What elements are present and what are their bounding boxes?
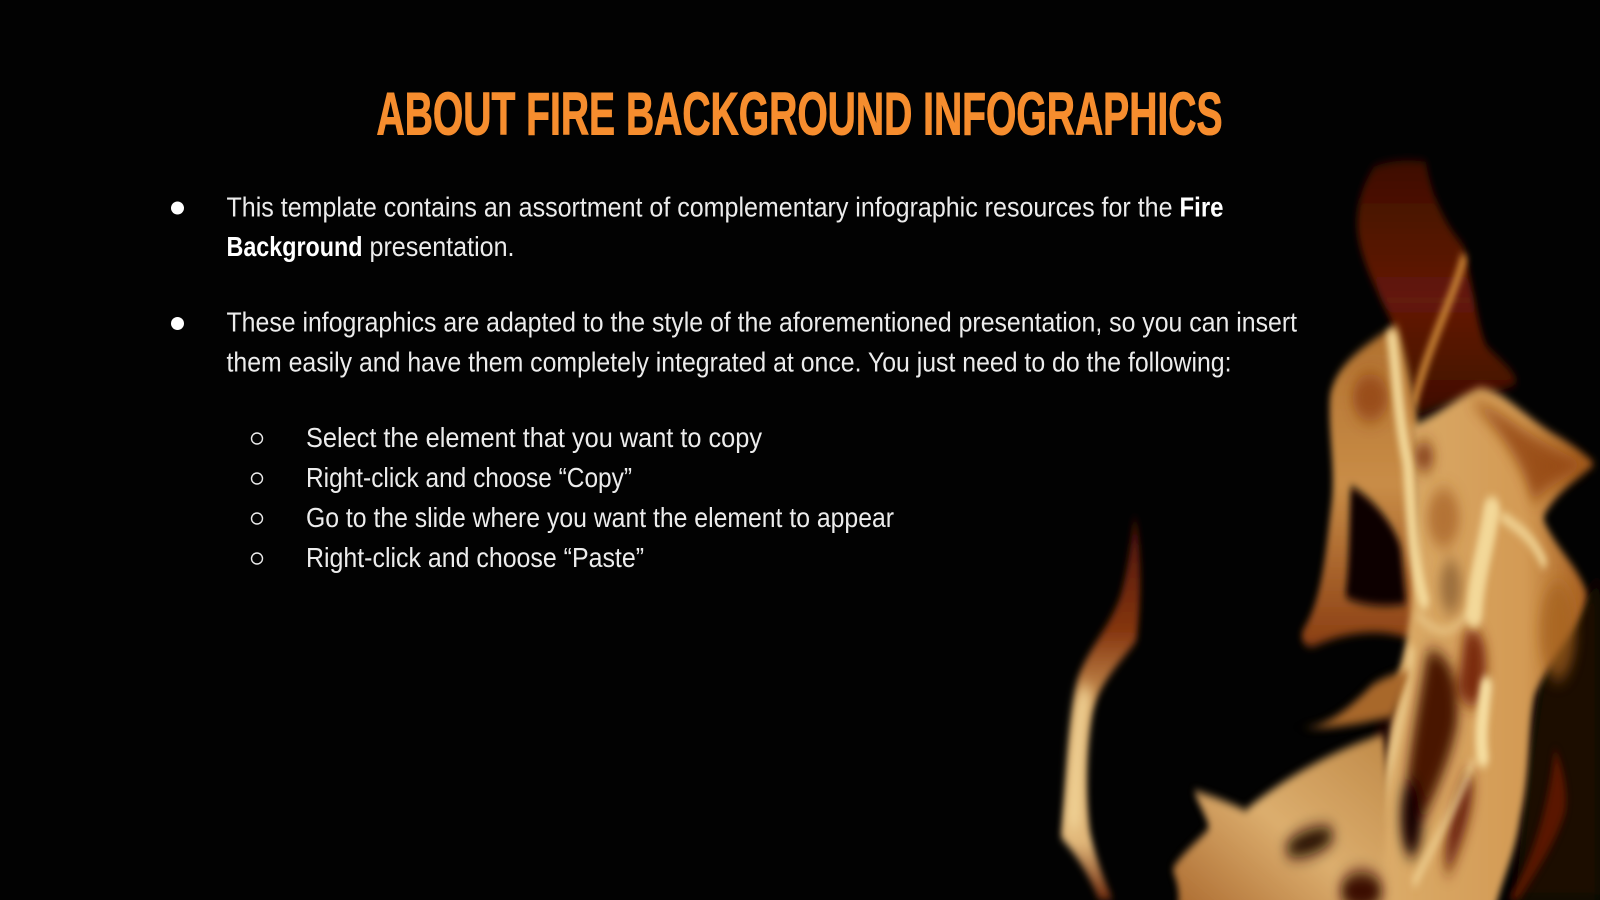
step 1 marker [252, 433, 262, 444]
flame: lower right red tongue [1508, 749, 1566, 900]
flame: dark spot in bottom sweep [1283, 821, 1336, 863]
flame: bottom sweep [1172, 734, 1387, 900]
flame: right main body [1361, 388, 1595, 900]
highlight: upper right streak [1504, 518, 1544, 562]
highlight: diagonal [1415, 764, 1472, 881]
paragraph 2 line 1: These infographics are adapted to the style of the aforementioned presentation, so you can insert [226, 306, 1297, 338]
flame: upper left main tongue [1302, 324, 1422, 646]
step 4 marker [252, 553, 262, 564]
flame: deep interior shadows [1377, 629, 1486, 876]
patch: right side [1540, 582, 1576, 680]
step 3: Go to the slide where you want the element to appear [306, 502, 894, 533]
highlight: right streak [1474, 508, 1492, 616]
step 4: Right-click and choose “Paste” [306, 542, 644, 573]
patch: mid grey-brown [1440, 560, 1461, 614]
bold: Background: Background [226, 231, 362, 262]
highlight: column edge [1379, 651, 1411, 818]
sub-list of steps [252, 422, 894, 573]
flame photograph [1061, 160, 1600, 900]
paragraph 1 line 2: presentation. [370, 231, 514, 262]
flame: dark bottom notch [1340, 872, 1383, 900]
flame: bright highlights [1379, 336, 1544, 881]
bullet paragraph 1 [171, 192, 1224, 262]
flame: black hole in left tongue [1345, 486, 1406, 606]
paragraph 2 line 2: them easily and have them completely integrated at once. You just need to do the following: [226, 346, 1232, 378]
shadow: central column [1404, 651, 1458, 857]
highlight: central streak [1392, 336, 1424, 601]
flame: rust upper right edge [1469, 400, 1586, 503]
step 3 marker [252, 513, 262, 524]
shadow: right column [1458, 629, 1486, 707]
flame: dark red top tongue [1357, 160, 1517, 415]
patch: centre [1427, 489, 1460, 547]
flame: small left tongue [1061, 516, 1140, 900]
flame: thin wisp [1294, 670, 1410, 728]
flame: orange edge on red tongue [1413, 255, 1464, 405]
flame: small tongue highlight [1074, 695, 1085, 822]
highlight: crossing streak [1419, 611, 1469, 630]
step 2: Right-click and choose “Copy” [306, 462, 632, 493]
bullet paragraph 2 [171, 306, 1297, 378]
bullet dot [171, 202, 184, 214]
shadow: gap right of bottom sweep [1377, 695, 1397, 783]
shadow: black base of column [1401, 778, 1422, 857]
step 2 marker [252, 473, 262, 484]
highlight: lower streak [1481, 685, 1486, 759]
patch: small [1414, 442, 1434, 471]
bold: Fire: Fire [1180, 192, 1224, 222]
flame: dim embers right edge [1515, 574, 1600, 900]
bullet dot [171, 317, 184, 330]
paragraph 1 line 1: This template contains an assortment of complementary infographic resources for the [226, 192, 1172, 222]
shadow: lower centre [1445, 768, 1473, 876]
step 1: Select the element that you want to copy [306, 422, 762, 453]
flame: inner brown patches [1352, 374, 1576, 680]
patch: shoulder [1352, 374, 1388, 421]
